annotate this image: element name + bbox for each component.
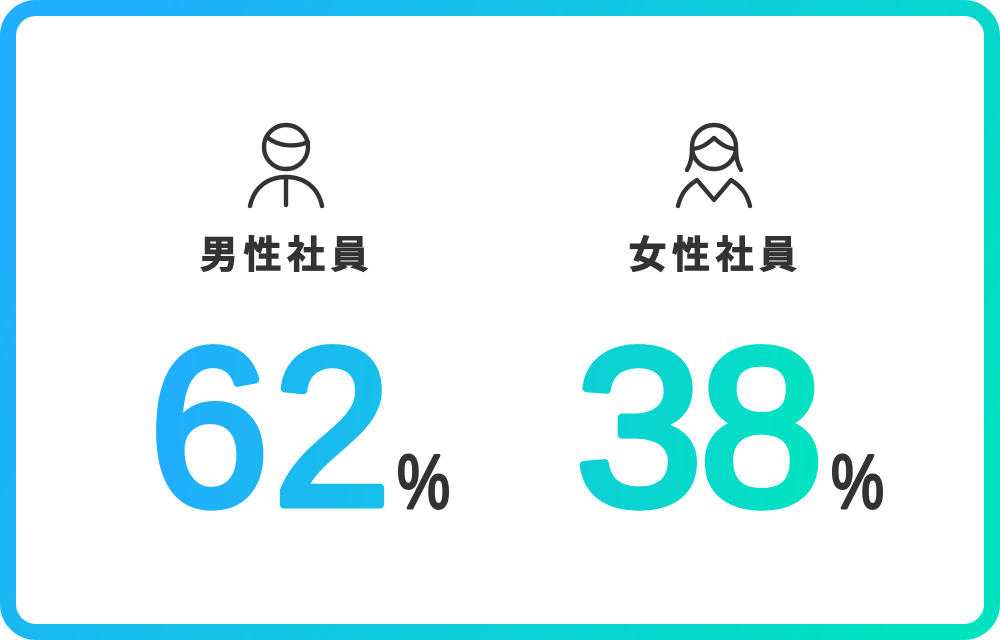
figure: female 38 percent	[575, 302, 884, 552]
figure: male 62 percent	[149, 302, 450, 552]
icon: male employee	[250, 125, 322, 206]
figure: male 62 percent: %	[397, 440, 450, 525]
figure: male 62 percent: 2	[273, 302, 391, 552]
label: female employees: 女性社員	[628, 235, 803, 277]
figure: female 38 percent: 3	[575, 302, 703, 552]
icon: female employee	[678, 125, 750, 206]
figure: male 62 percent: 6	[149, 302, 269, 552]
label: male employees: 男性社員	[200, 235, 374, 277]
figure: female 38 percent: %	[831, 440, 884, 525]
figure: female 38 percent: 8	[699, 302, 824, 552]
